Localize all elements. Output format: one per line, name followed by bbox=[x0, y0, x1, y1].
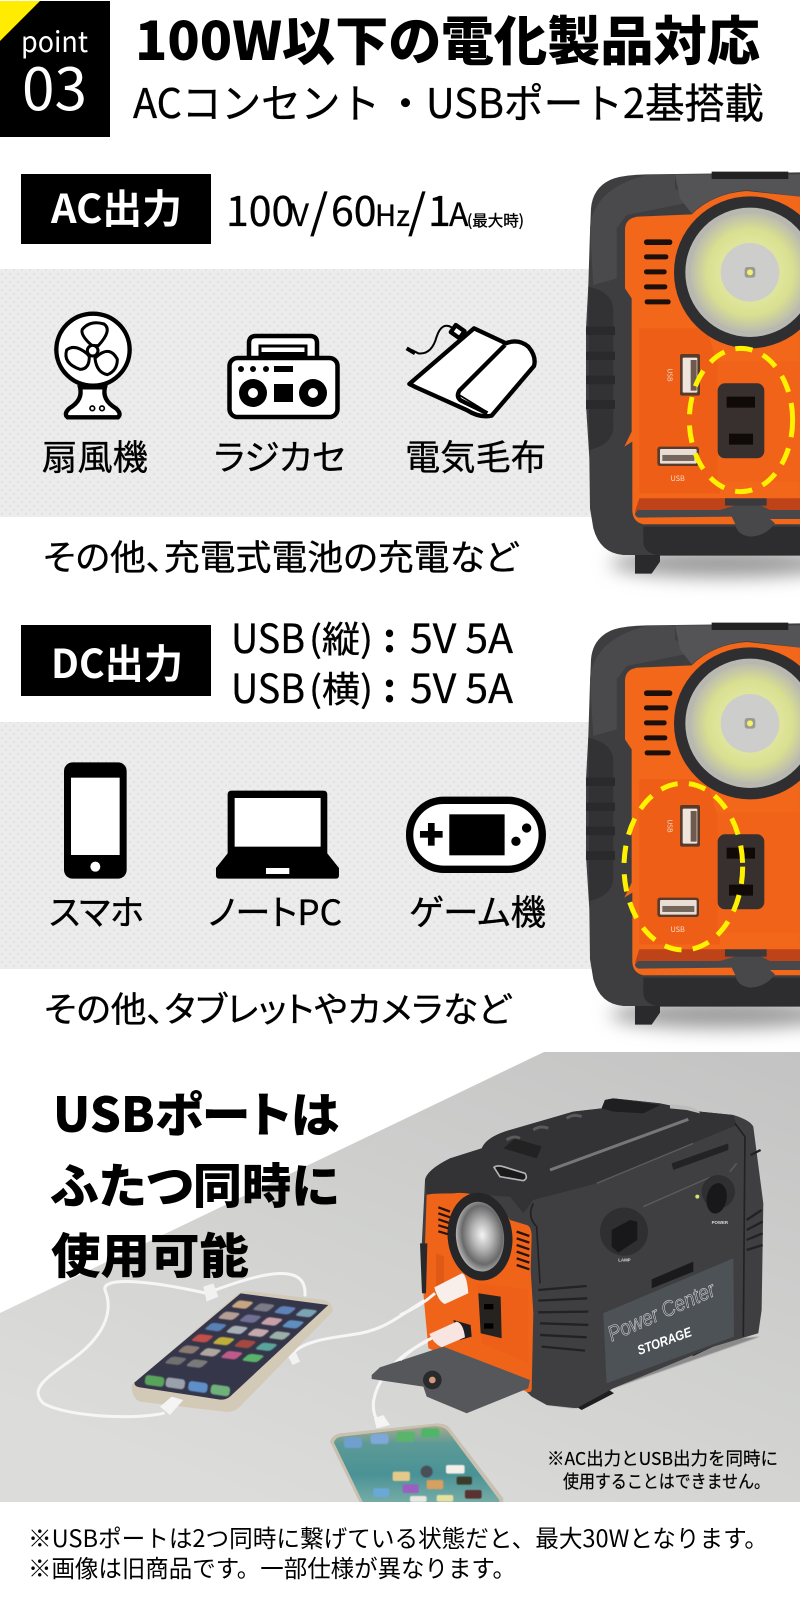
icon: radio cassette bbox=[230, 336, 338, 417]
icon: yellow corner triangle bbox=[0, 1, 40, 41]
DC output specification bbox=[231, 606, 514, 715]
title: 100W以下の電化製品対応 bbox=[135, 0, 760, 76]
AC output specification: 60 bbox=[331, 178, 377, 238]
DC output label: DC出力 bbox=[51, 632, 183, 690]
footnotes: ※画像は旧商品です。一部仕様が異なります。 bbox=[28, 1549, 516, 1584]
heading: two USB ports simultaneously: ふたつ同時に bbox=[51, 1147, 339, 1217]
text: other DC uses: その他、タブレットやカメラなど bbox=[44, 982, 512, 1033]
panel lettering: STORAGE bbox=[635, 1324, 694, 1358]
DC output specification: (縦) bbox=[309, 611, 373, 663]
subtitle: ACコンセント bbox=[133, 70, 380, 130]
device label: game console: ゲーム機 bbox=[409, 885, 546, 936]
icon: electric blanket bbox=[407, 325, 535, 416]
panel lettering bbox=[604, 1220, 729, 1358]
device label: smartphone: スマホ bbox=[49, 885, 144, 936]
panel lettering: POWER bbox=[712, 1220, 729, 1225]
DC output specification: 5V 5A bbox=[410, 657, 514, 715]
heading: two USB ports simultaneously: 使用可能 bbox=[51, 1217, 249, 1287]
device label: electric blanket: 電気毛布 bbox=[405, 430, 546, 481]
device label: laptop: ノートPC bbox=[208, 885, 342, 936]
panel: DC devices dotted band bbox=[0, 722, 800, 969]
AC output specification: / bbox=[310, 176, 328, 242]
AC output specification: A bbox=[449, 190, 469, 236]
DC output specification: USB bbox=[231, 607, 305, 665]
badge: point 03 bbox=[0, 1, 110, 137]
subtitle: USBポート2基搭載 bbox=[426, 70, 764, 130]
subtitle bbox=[133, 70, 764, 130]
device label: radio cassette: ラジカセ bbox=[214, 430, 346, 481]
note: AC and USB cannot be used together: ※AC出力とUSB出力を同時に bbox=[547, 1445, 778, 1471]
AC output specification: Hz bbox=[375, 193, 410, 235]
text: other AC uses: その他、充電式電池の充電など bbox=[43, 530, 519, 581]
icon: laptop bbox=[216, 791, 339, 879]
AC output specification: 100 bbox=[226, 178, 294, 238]
AC output specification: 1 bbox=[428, 178, 451, 238]
DC output label bbox=[21, 625, 211, 696]
DC output specification: (横) bbox=[309, 661, 373, 713]
DC output specification: 5V 5A bbox=[410, 607, 514, 665]
AC output specification: (最大時) bbox=[467, 209, 524, 231]
phone lying on table with cables bbox=[38, 1273, 503, 1507]
panel lettering: LAMP bbox=[618, 1258, 631, 1263]
photo: power station charging two phones bbox=[0, 1052, 800, 1507]
note: AC and USB cannot be used together bbox=[549, 1449, 776, 1490]
icon: electric fan bbox=[56, 314, 130, 417]
AC output label bbox=[21, 174, 211, 244]
icon: smartphone bbox=[64, 762, 127, 879]
product photo: USB ports highlighted bbox=[586, 623, 800, 1028]
AC output specification: / bbox=[408, 176, 426, 242]
badge label: point bbox=[21, 19, 88, 61]
heading: two USB ports simultaneously bbox=[51, 1076, 339, 1287]
footnotes bbox=[28, 1519, 768, 1584]
panel: AC devices dotted band bbox=[0, 269, 800, 517]
icon: handheld game console bbox=[410, 800, 542, 869]
badge number: 03 bbox=[22, 43, 87, 127]
power station product bbox=[372, 1098, 763, 1413]
heading: two USB ports simultaneously: USBポートは bbox=[53, 1076, 339, 1146]
product photo: AC socket highlighted bbox=[586, 172, 800, 577]
DC output specification: : bbox=[383, 606, 396, 664]
second phone, front bbox=[330, 1423, 503, 1507]
DC output specification: USB bbox=[231, 657, 305, 715]
panel lettering: Power Center bbox=[604, 1277, 719, 1346]
device label: fan: 扇風機 bbox=[42, 430, 148, 481]
AC output specification: V bbox=[291, 190, 309, 235]
DC output specification: : bbox=[383, 656, 396, 714]
subtitle: ・ bbox=[385, 70, 426, 130]
AC output label: AC出力 bbox=[50, 177, 182, 235]
dashed highlight: AC socket bbox=[689, 348, 793, 492]
footnotes: ※USBポートは2つ同時に繋げている状態だと、最大30Wとなります。 bbox=[28, 1519, 768, 1554]
dashed highlight: USB ports bbox=[624, 783, 743, 950]
note: AC and USB cannot be used together: 使用することはできません。 bbox=[563, 1468, 770, 1494]
